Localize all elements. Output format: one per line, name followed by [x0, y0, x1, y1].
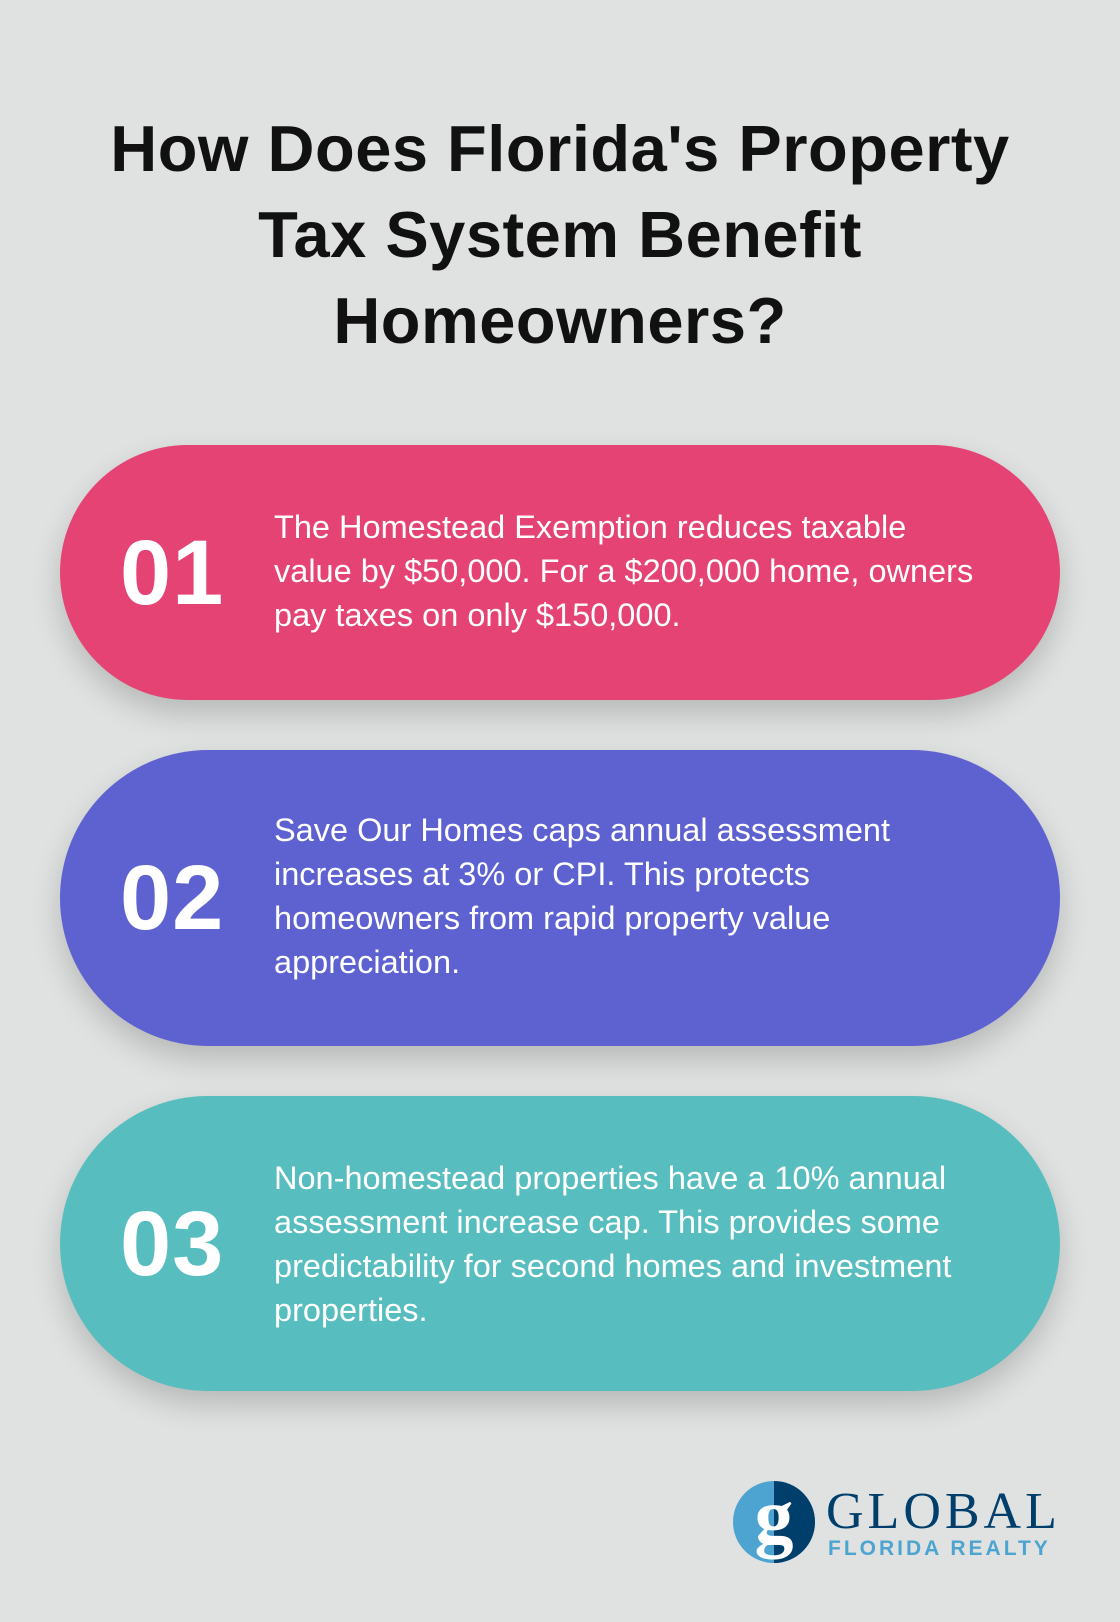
title [110, 112, 1010, 357]
text 03: Non-homestead properties have a 10% annual assessment increase cap. This provides some predictability for second homes and investment properties. [274, 1160, 951, 1328]
panel: item 02 [60, 750, 1060, 1046]
logo [733, 1480, 1061, 1563]
panel: item 01 [60, 445, 1060, 700]
text 01: The Homestead Exemption reduces taxable value by $50,000. For a $200,000 home, owners pay taxes on only $150,000. [274, 509, 973, 633]
number 02: 02 [120, 847, 224, 949]
number 03: 03 [120, 1193, 224, 1295]
title: Tax System Benefit [258, 198, 862, 271]
panel: item 03 [60, 1096, 1060, 1391]
text 02: Save Our Homes caps annual assessment increases at 3% or CPI. This protects homeowners from rapid property value appreciation. [274, 812, 890, 980]
logo text: GLOBAL [826, 1483, 1061, 1540]
title: Homeowners? [333, 284, 787, 357]
number 01: 01 [120, 522, 224, 624]
title: How Does Florida's Property [110, 112, 1010, 185]
icon: g circle [733, 1480, 815, 1563]
logo: FLORIDA REALTY [828, 1537, 1051, 1560]
